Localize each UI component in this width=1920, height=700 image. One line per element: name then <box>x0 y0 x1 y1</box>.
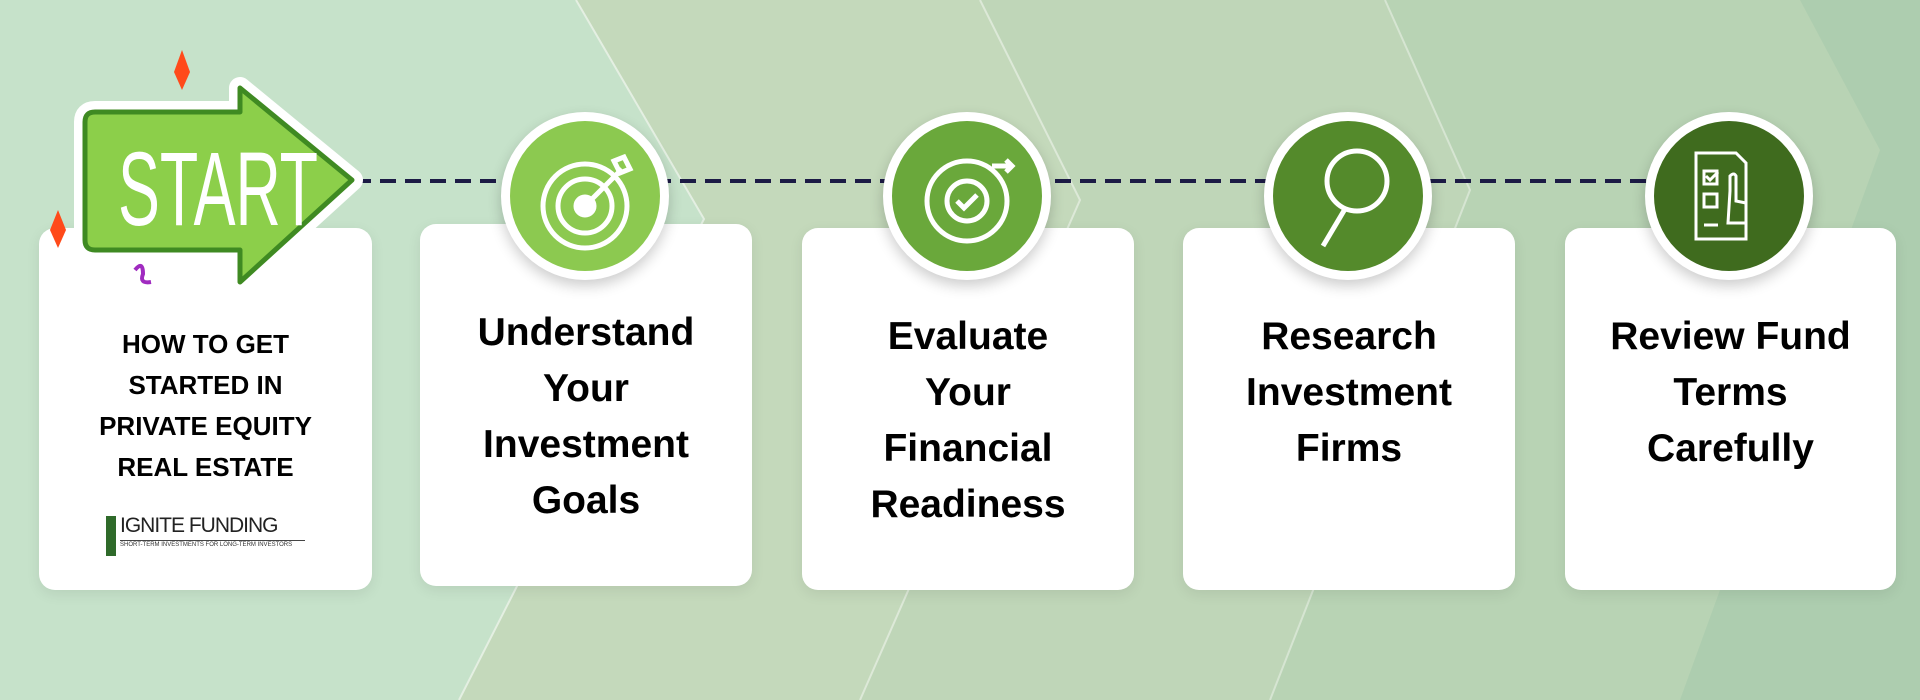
card 3: Evaluate Your Financial Readiness: Your <box>925 371 1011 414</box>
card 4: Research Investment Firms: Investment <box>1246 371 1452 414</box>
card 2: Understand Your Investment Goals: Your <box>543 367 629 410</box>
card 5: Review Fund Terms Carefully <box>1565 228 1896 590</box>
icon: checklist document <box>1645 112 1813 280</box>
card 3: Evaluate Your Financial Readiness: Financial <box>883 427 1053 470</box>
start arrow sticker <box>50 50 363 284</box>
icon: gear with check <box>883 112 1051 280</box>
card 2: Understand Your Investment Goals: Understand <box>478 311 694 354</box>
card 5: Review Fund Terms Carefully: Carefully <box>1647 427 1814 470</box>
card 3: Evaluate Your Financial Readiness: Evaluate <box>888 315 1048 358</box>
card 4: Research Investment Firms <box>1183 228 1515 590</box>
card 4: Research Investment Firms: Firms <box>1296 427 1402 470</box>
intro heading <box>99 329 312 482</box>
intro heading: REAL ESTATE <box>117 452 294 482</box>
intro heading: PRIVATE EQUITY <box>99 411 312 441</box>
logo: Ignite Funding: SHORT-TERM INVESTMENTS FOR LONG-TERM INVESTORS <box>120 542 292 548</box>
card 3: Evaluate Your Financial Readiness <box>802 228 1134 590</box>
intro heading: HOW TO GET <box>122 329 289 359</box>
card 2: Understand Your Investment Goals: Investment <box>483 423 689 466</box>
card 4: Research Investment Firms: Research <box>1261 315 1437 358</box>
card 5: Review Fund Terms Carefully: Terms <box>1673 371 1788 414</box>
icon: target <box>501 112 669 280</box>
icon: magnifying glass <box>1264 112 1432 280</box>
card 2: Understand Your Investment Goals <box>420 224 752 586</box>
card 3: Evaluate Your Financial Readiness: Readiness <box>870 483 1066 526</box>
card 2: Understand Your Investment Goals: Goals <box>532 479 640 522</box>
card 1: intro <box>39 228 372 590</box>
logo: Ignite Funding: IGNITE FUNDING <box>120 514 278 537</box>
logo: Ignite Funding <box>106 514 305 556</box>
intro heading: STARTED IN <box>128 370 283 400</box>
start arrow sticker: START <box>118 130 318 248</box>
card 5: Review Fund Terms Carefully: Review Fund <box>1610 315 1851 358</box>
